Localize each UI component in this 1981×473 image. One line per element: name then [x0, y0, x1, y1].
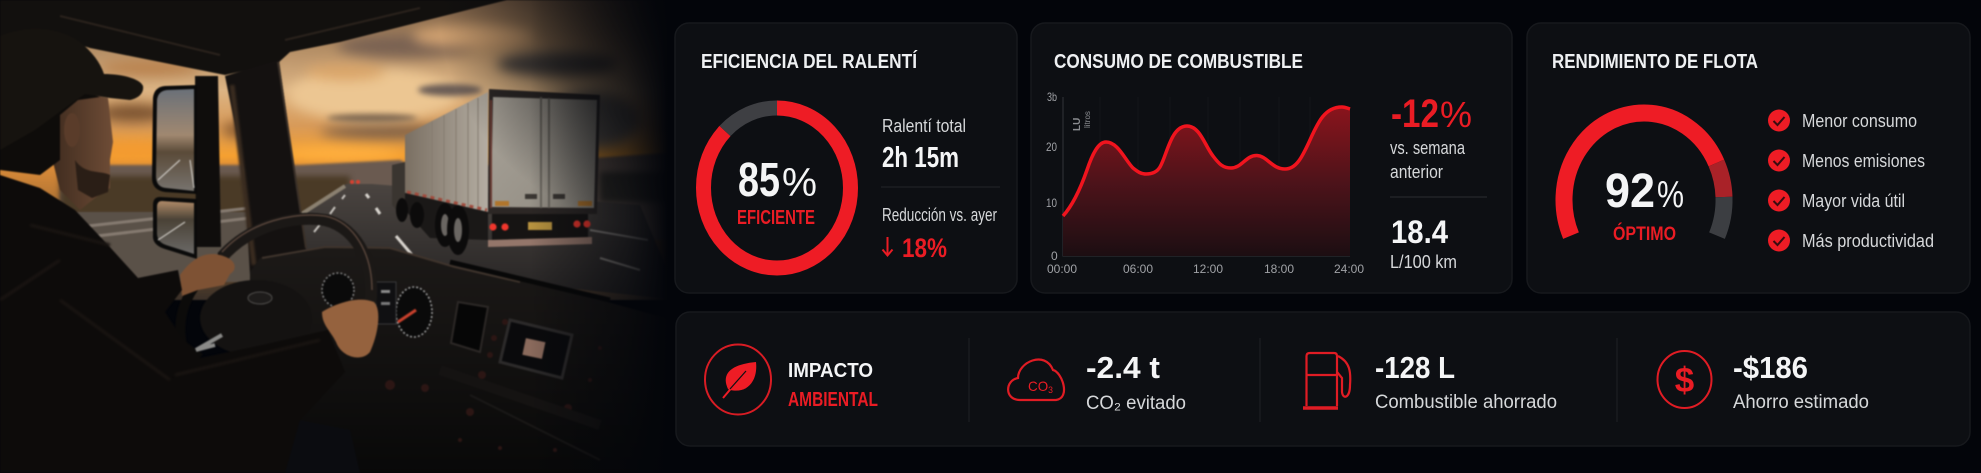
heading: CONSUMO DE COMBUSTIBLE	[1054, 51, 1303, 73]
check item: Mayor vida útil	[1802, 191, 1905, 211]
driver	[0, 34, 250, 472]
chart y axis labels: 3b	[1047, 90, 1057, 104]
stat: combustible ahorrado	[1375, 350, 1557, 413]
photo hills and land	[60, 152, 680, 282]
area chart	[1046, 90, 1364, 276]
heading: EFICIENCIA DEL RALENTÍ	[701, 50, 917, 73]
truck tail lights and plate	[489, 223, 497, 231]
chart axis title	[1072, 111, 1092, 131]
lower side mirror	[153, 197, 197, 259]
photo sky	[0, 0, 680, 300]
driver hair	[0, 90, 100, 175]
steering wheel	[180, 215, 372, 358]
value 92%: 92	[1605, 165, 1655, 218]
stat: 18.4 L/100 km: 18.4	[1391, 214, 1448, 250]
stat: -12%: %	[1440, 94, 1472, 135]
stat: reducción vs. ayer: 18%	[902, 233, 947, 263]
check item: Menor consumo	[1802, 111, 1917, 131]
check item	[1768, 230, 1934, 252]
label eficiente: EFICIENTE	[737, 207, 815, 229]
check item: Menos emisiones	[1802, 151, 1925, 171]
dashboard	[249, 248, 623, 460]
panel: rendimiento de flota	[1527, 23, 1970, 293]
driver face	[52, 96, 114, 209]
instrument gauges	[322, 273, 354, 307]
stat: reducción vs. ayer: Reducción vs. ayer	[882, 205, 997, 225]
center vent	[451, 302, 488, 352]
stat: reducción vs. ayer	[882, 205, 997, 263]
chart axis title: litros	[1083, 111, 1092, 128]
chart x axis labels: 18:00	[1264, 262, 1294, 276]
truck rear doors	[488, 89, 600, 214]
heading: impacto ambiental: AMBIENTAL	[788, 389, 878, 411]
stat: CO2 evitado: CO₂ evitado	[1086, 393, 1186, 414]
stat: combustible ahorrado: Combustible ahorrado	[1375, 392, 1557, 413]
stat: -12%: anterior	[1390, 162, 1443, 182]
check item	[1768, 150, 1925, 172]
icon: CO2 cloud: CO	[1028, 378, 1049, 394]
chart y axis labels: 20	[1046, 140, 1057, 154]
photo clouds	[93, 26, 640, 160]
driver's hands	[180, 254, 378, 357]
heading: impacto ambiental: IMPACTO	[788, 360, 873, 382]
heading: RENDIMIENTO DE FLOTA	[1552, 51, 1758, 73]
driver jacket	[0, 174, 250, 472]
check item	[1768, 110, 1917, 132]
truck cab	[392, 162, 405, 212]
stat: ahorro estimado: Ahorro estimado	[1733, 392, 1869, 413]
chart y axis labels: 0	[1051, 249, 1058, 263]
stat: ralentí total	[882, 116, 966, 174]
arc gauge 92%	[1564, 113, 1724, 236]
icon: leaf in circle	[705, 344, 771, 414]
stat: ralentí total: Ralentí total	[882, 116, 966, 136]
value 85%: %	[782, 161, 817, 205]
chart axis title: LU	[1072, 118, 1083, 131]
label óptimo: ÓPTIMO	[1613, 223, 1676, 245]
checklist	[1768, 110, 1934, 252]
icon: CO2 cloud: 3	[1048, 385, 1053, 395]
stat: combustible ahorrado: -128 L	[1375, 350, 1455, 385]
stat: 18.4 L/100 km: L/100 km	[1390, 252, 1457, 272]
check item: Más productividad	[1802, 231, 1934, 251]
panel: impacto ambiental strip	[676, 312, 1970, 446]
truck underside and wheels	[405, 193, 488, 240]
infotainment screen	[500, 320, 572, 378]
dash buttons	[385, 319, 602, 452]
chart x axis labels: 00:00	[1047, 262, 1077, 276]
stat: ahorro estimado: -$186	[1733, 350, 1808, 385]
chart x axis labels: 06:00	[1123, 262, 1153, 276]
value 92%: %	[1657, 174, 1684, 216]
stat: 18.4 L/100 km	[1390, 214, 1457, 272]
chart x axis labels: 12:00	[1193, 262, 1223, 276]
panel: consumo de combustible	[1031, 23, 1512, 293]
photo highway	[301, 179, 655, 294]
value 85%: 85	[738, 154, 780, 207]
stat: CO2 evitado: -2.4 t	[1086, 350, 1160, 385]
photo: driver in truck cab at sunset	[0, 0, 680, 473]
icon: dollar coin	[1658, 351, 1712, 408]
driver cap	[0, 34, 144, 101]
upper side mirror	[152, 85, 197, 194]
stat: -12%: vs. semana	[1390, 138, 1466, 158]
photo right fade	[530, 0, 670, 473]
photo truck ahead	[392, 89, 600, 255]
check item	[1768, 190, 1905, 212]
chart y axis labels: 10	[1046, 196, 1057, 210]
driver ear	[64, 114, 76, 146]
chart x axis labels	[1047, 262, 1364, 276]
photo top right fade	[448, 0, 662, 198]
stat: CO2 evitado	[1086, 350, 1186, 414]
cab A-pillar	[225, 60, 306, 275]
stat: -12%	[1390, 92, 1472, 182]
value 92%	[1605, 165, 1684, 218]
stat: ahorro estimado	[1733, 350, 1869, 413]
side mirror mount	[195, 76, 221, 247]
icon: dollar coin: $	[1675, 361, 1694, 400]
stat: -12%: -12	[1391, 92, 1439, 136]
icon: CO2 cloud	[1008, 360, 1064, 400]
heading: impacto ambiental	[788, 360, 878, 411]
panel: eficiencia del ralentí	[675, 23, 1017, 293]
truck side wall	[405, 92, 488, 212]
icon: fuel pump	[1303, 353, 1350, 408]
chart y axis labels	[1046, 90, 1058, 263]
cab roof frame	[0, 0, 507, 75]
value 85%	[738, 154, 817, 207]
stat: ralentí total: 2h 15m	[882, 142, 959, 174]
chart x axis labels: 24:00	[1334, 262, 1364, 276]
donut gauge 85%	[703, 108, 850, 268]
